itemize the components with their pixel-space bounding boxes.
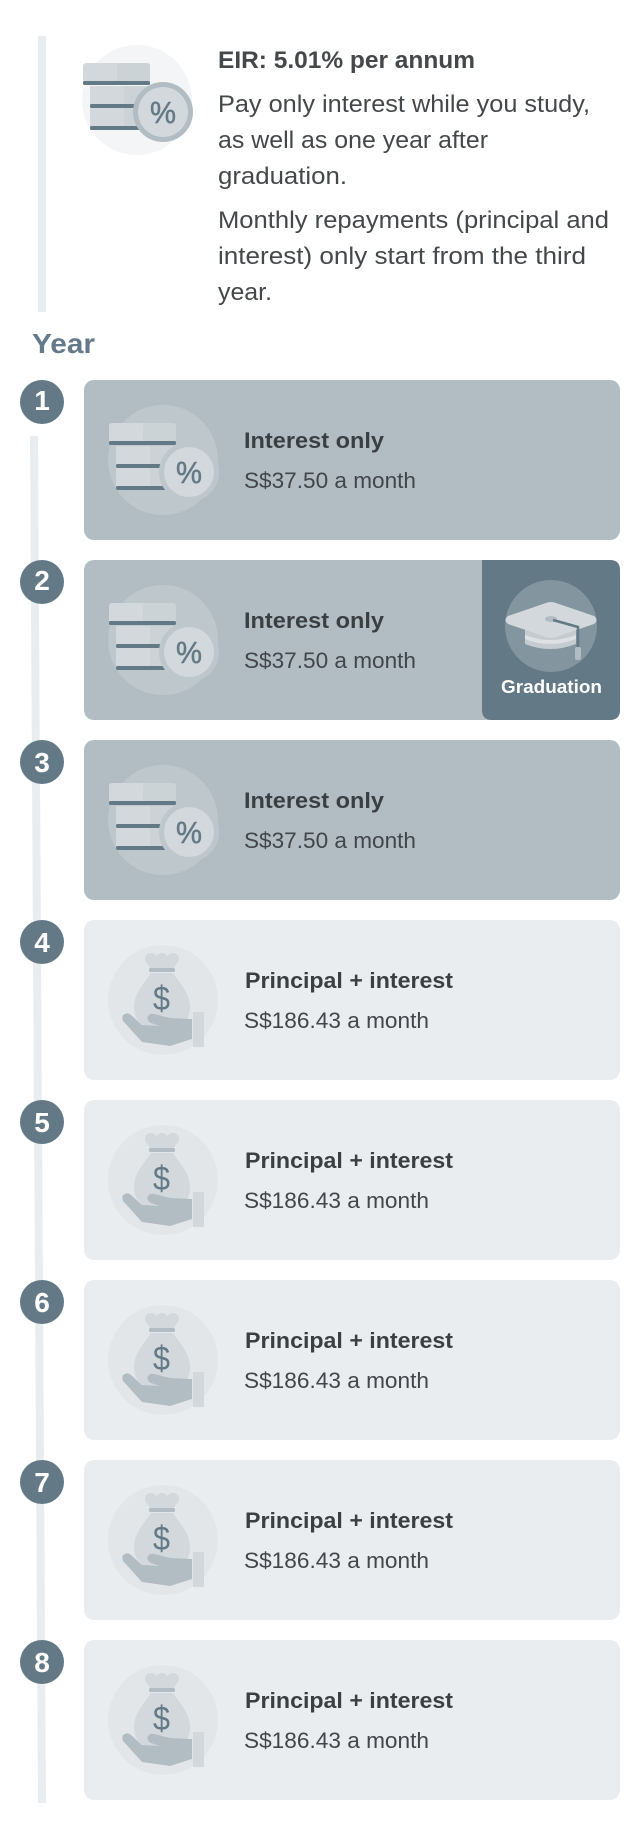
row: year 3 (20, 740, 620, 900)
row: year 2: S$37.50 a month (244, 648, 416, 673)
row: year 2: 2 (34, 565, 50, 596)
row: year 8: S$186.43 a month (244, 1728, 429, 1753)
row: year 3: % (176, 815, 202, 850)
row: year 7: $ (153, 1520, 170, 1558)
row: year 2: % (176, 635, 202, 670)
row: year 2: Interest only (244, 608, 385, 633)
row: year 4: 4 (34, 927, 50, 958)
row: year 4: $ (153, 980, 170, 1018)
icon: coin stack with percent (intro): % (150, 95, 176, 130)
intro text block: Monthly repayments (principal and (218, 207, 609, 234)
row: year 7: Principal + interest (245, 1508, 454, 1533)
row: year 1: S$37.50 a month (244, 468, 416, 493)
row: year 6 (20, 1280, 620, 1440)
row: year 3: 3 (34, 747, 50, 778)
row: year 8: 8 (34, 1647, 50, 1678)
row: year 7: S$186.43 a month (244, 1548, 429, 1573)
row: year 6: $ (153, 1340, 170, 1378)
row: year 1: 1 (34, 385, 50, 416)
Year heading: Year (32, 328, 95, 359)
icon: coin stack with percent (intro) (82, 45, 193, 155)
row: year 8: Principal + interest (245, 1688, 454, 1713)
intro text block: graduation. (218, 163, 347, 190)
intro text block: as well as one year after (218, 127, 488, 154)
row: year 8 (20, 1640, 620, 1800)
row: year 4: Principal + interest (245, 968, 454, 993)
row: year 8: $ (153, 1700, 170, 1738)
row: year 6: Principal + interest (245, 1328, 454, 1353)
row: year 3: Interest only (244, 788, 385, 813)
intro text block: interest) only start from the third (218, 243, 586, 270)
intro text block: year. (218, 279, 272, 306)
row: year 5: Principal + interest (245, 1148, 454, 1173)
row: year 7: 7 (34, 1467, 50, 1498)
row: year 1: Interest only (244, 428, 385, 453)
row: year 5: 5 (34, 1107, 50, 1138)
row: year 6: 6 (34, 1287, 50, 1318)
graduation panel: Graduation (501, 677, 602, 697)
row: year 1: % (176, 455, 202, 490)
row: year 1 (20, 380, 620, 540)
row: year 3: S$37.50 a month (244, 828, 416, 853)
row: year 6: S$186.43 a month (244, 1368, 429, 1393)
graduation panel (482, 560, 620, 720)
row: year 4: S$186.43 a month (244, 1008, 429, 1033)
intro text block: Pay only interest while you study, (218, 91, 590, 118)
row: year 2 (20, 560, 620, 720)
row: year 5: S$186.43 a month (244, 1188, 429, 1213)
row: year 5 (20, 1100, 620, 1260)
row: year 5: $ (153, 1160, 170, 1198)
intro heading: EIR: 5.01% per annum (218, 47, 475, 74)
row: year 4 (20, 920, 620, 1080)
row: year 7 (20, 1460, 620, 1620)
intro text block (218, 91, 609, 306)
